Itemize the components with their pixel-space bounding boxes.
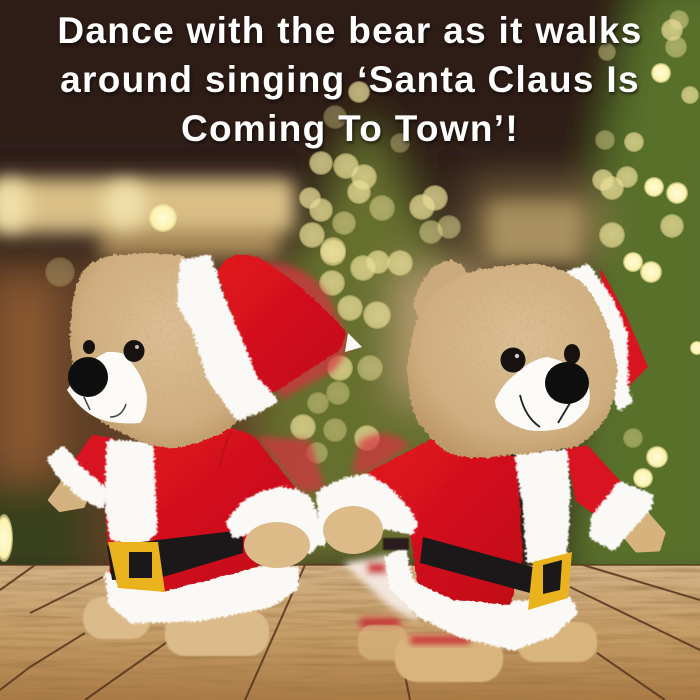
title (57, 10, 643, 152)
bokeh lights (0, 10, 700, 562)
right bear ear (413, 260, 467, 323)
right bear motion blur (343, 555, 420, 628)
right bear hem fur (388, 551, 574, 647)
left bear far cuff (51, 450, 103, 505)
left bear red coat (105, 428, 303, 592)
right bear red coat (367, 438, 523, 605)
right bear far cuff (593, 485, 650, 547)
title: around singing ‘Santa Claus Is (60, 59, 640, 100)
left bear head (70, 253, 245, 448)
left bear eyes (83, 340, 144, 362)
right bear hat (600, 268, 648, 387)
title: Dance with the bear as it walks (57, 10, 643, 51)
right bear hat brim (566, 268, 629, 407)
right bear head (407, 265, 617, 458)
right bear near paw (323, 506, 383, 554)
left bear belt (107, 530, 243, 580)
right bear white front trim (518, 453, 567, 560)
right bear far sleeve (567, 447, 620, 517)
right bear muzzle (495, 357, 590, 431)
blurred red ghost of moving hat and body (255, 262, 410, 492)
right bear belt (420, 537, 533, 593)
left bear hat (217, 255, 347, 395)
left bear (50, 253, 362, 656)
right bear foot red blur (410, 636, 470, 644)
left bear near paw (244, 522, 310, 568)
left bear muzzle (67, 352, 147, 423)
right bear dark blur under arm (383, 538, 409, 550)
floor: wooden table (0, 565, 700, 700)
left bear coat shoulder shade (219, 432, 232, 470)
left bear hem fur (108, 570, 295, 620)
left bear near cuff (230, 490, 319, 550)
bright window lights (0, 180, 580, 260)
title: Coming To Town’! (181, 108, 519, 149)
right bear nose (545, 362, 589, 404)
left bear hat brim (180, 258, 274, 417)
left bear nose (68, 357, 108, 397)
right bear (320, 260, 663, 682)
left bear base feet (83, 597, 269, 656)
right bear near cuff (320, 478, 414, 543)
left bear buckle (108, 542, 165, 592)
left bear mouth (84, 397, 126, 417)
right bear base feet (358, 622, 597, 682)
right bear buckle (528, 552, 572, 610)
left bear far sleeve (77, 437, 112, 492)
left bear hat tip (345, 333, 362, 352)
right bear mouth (520, 395, 570, 427)
warm light band left (0, 178, 295, 258)
right bear eyes (500, 344, 580, 372)
left bear far paw (50, 482, 90, 510)
right bear far paw (618, 510, 663, 550)
left bear white front trim (108, 443, 154, 544)
